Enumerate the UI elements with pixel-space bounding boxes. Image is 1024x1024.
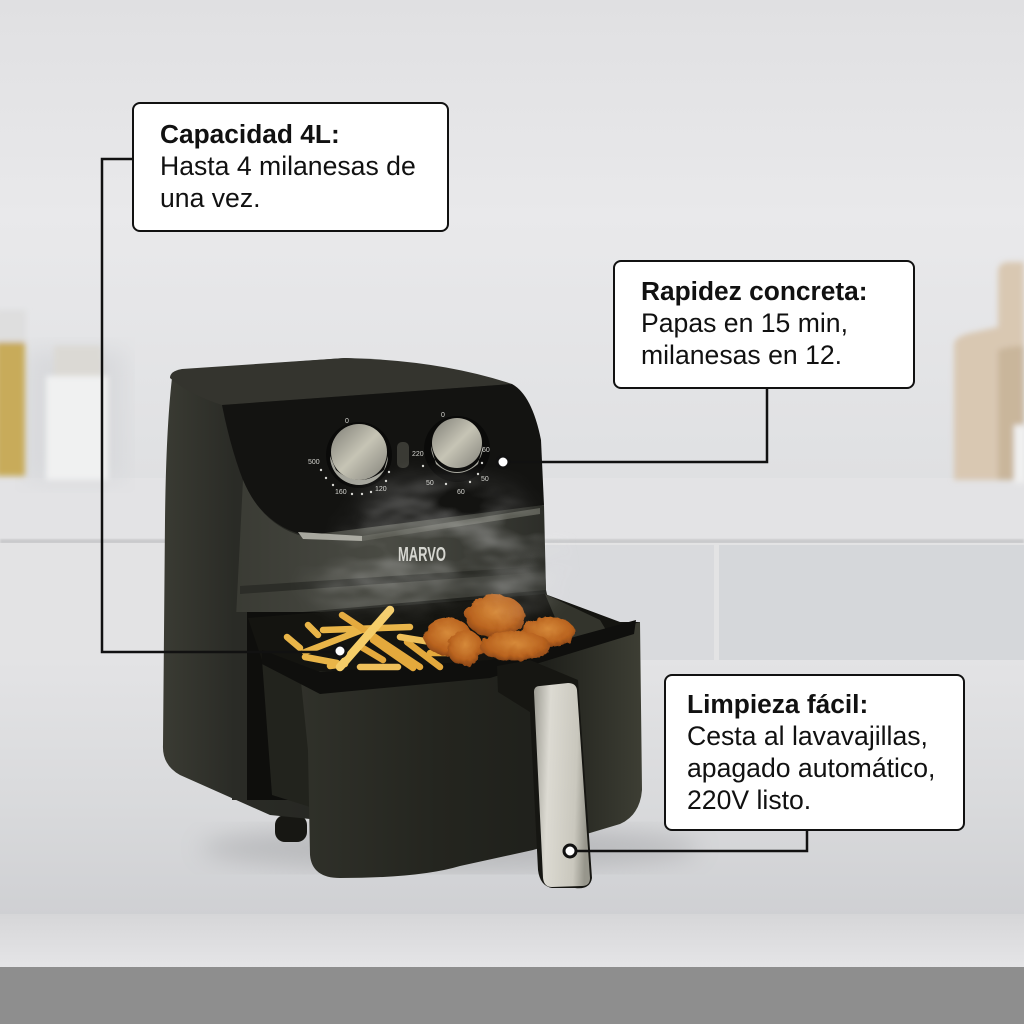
blurred jars on the left (0, 310, 125, 480)
leader: cleaning (564, 829, 807, 857)
lid top (170, 358, 512, 405)
callout: speed: Papas en 15 min, (641, 308, 848, 338)
callout: speed: Rapidez concreta: (641, 276, 868, 306)
back counter (0, 478, 1024, 542)
callout: cleaning: Limpieza fácil: (687, 689, 868, 719)
callout: cleaning (664, 674, 965, 831)
dial markings: 0 (345, 418, 349, 425)
handle (497, 660, 592, 888)
dial markings: 160 (335, 489, 347, 496)
lower cabinets (0, 543, 1024, 661)
steam (310, 480, 555, 615)
callout: speed (613, 260, 915, 389)
floor band (0, 967, 1024, 1024)
callout: capacity: Capacidad 4L: (160, 119, 340, 149)
dial markings: 500 (308, 459, 320, 466)
blurred cutting boards on the right (954, 262, 1024, 483)
brand logo: MARVO (398, 544, 446, 566)
leader: speed (497, 388, 767, 468)
callout: cleaning: 220V listo. (687, 785, 811, 815)
foot (275, 815, 307, 842)
knob: timer (424, 416, 490, 482)
body (163, 358, 560, 820)
front counter (0, 660, 1024, 916)
callout: speed: milanesas en 12. (641, 340, 842, 370)
basket front (300, 622, 642, 878)
dial markings: 50 (481, 476, 489, 483)
callout: capacity: una vez. (160, 183, 261, 213)
front band (236, 480, 546, 618)
dial markings (308, 412, 490, 496)
dial markings: 220 (412, 451, 424, 458)
french fries (287, 610, 450, 668)
dial markings: 120 (375, 486, 387, 493)
callout: capacity: Hasta 4 milanesas de (160, 151, 416, 181)
dial markings: 50 (426, 480, 434, 487)
dial markings: 60 (457, 489, 465, 496)
knob: temperature (326, 422, 392, 488)
control panel (222, 384, 544, 536)
basket side and interior (248, 594, 640, 680)
fryer shadow (200, 826, 700, 870)
callout: cleaning: apagado automático, (687, 753, 935, 783)
callout: capacity (132, 102, 449, 232)
leader: capacity (102, 159, 346, 657)
dial markings: 0 (441, 412, 445, 419)
callout: cleaning: Cesta al lavavajillas, (687, 721, 928, 751)
fried chicken (424, 595, 575, 666)
dial switch (397, 442, 409, 468)
opening (232, 612, 320, 800)
kitchen wall (0, 0, 1024, 480)
dial markings: 60 (482, 447, 490, 454)
air fryer (163, 358, 642, 888)
